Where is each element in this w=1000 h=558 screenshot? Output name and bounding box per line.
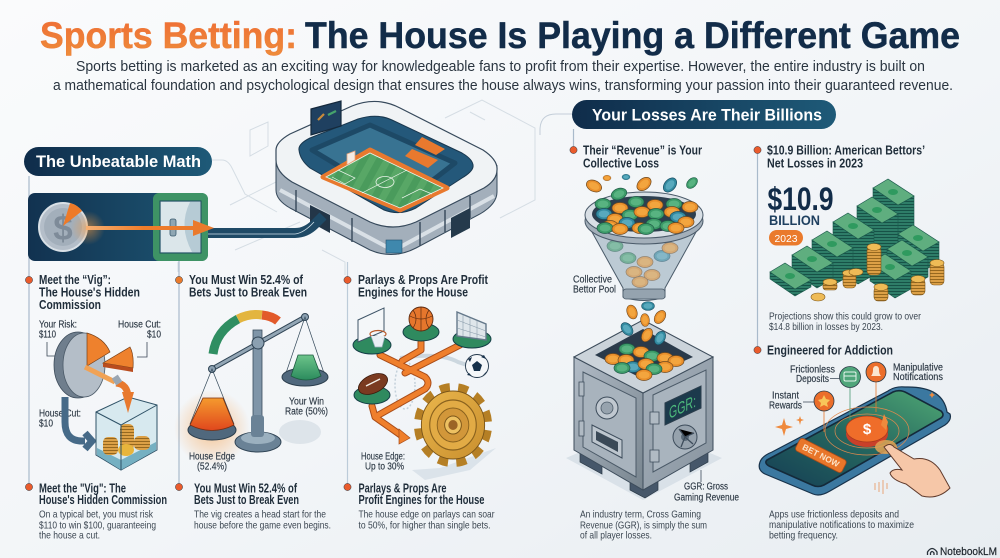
soccer ball: [466, 354, 488, 378]
stacks of cash and coins: [770, 179, 944, 301]
projection text: $14.8 billion in losses by 2023.: [769, 321, 883, 333]
bottom caption: vig: the house a cut.: [39, 530, 100, 542]
column: vig heading: [25, 273, 140, 312]
bet now button: BET NOW: [801, 442, 842, 469]
orange beam arrow: [86, 220, 214, 236]
green platforms: [353, 323, 491, 404]
pitch: [323, 150, 447, 210]
bet now button: [795, 437, 847, 473]
column: net losses heading: [754, 144, 925, 170]
coin stacks: [811, 244, 944, 301]
subtitle: Sports betting is marketed as an exciting way for knowledgeable fans to profit from their expertise. However, the entire industry is built on: [76, 59, 925, 75]
house edge label: House Edge:: [361, 452, 405, 462]
falling coins: [619, 302, 668, 347]
big number callout: BILLION: [769, 212, 820, 228]
dollar button: $: [863, 421, 872, 438]
stadium roof ring: [276, 101, 497, 227]
big number callout: 2023: [774, 233, 798, 245]
scale stand: [235, 330, 281, 452]
funnel rim: [585, 198, 703, 244]
gauge arc: [213, 314, 278, 354]
bottom caption: vig: $110 to win $100, guaranteeing: [39, 520, 156, 532]
GGR screen: [665, 386, 701, 425]
addiction body text: betting frequency.: [769, 530, 838, 542]
column: vig heading: Meet the “Vig”:: [39, 273, 111, 287]
blue curved arrow: [65, 397, 92, 449]
safe with GGR display: [566, 302, 722, 500]
bottom caption: break even: The vig creates a head start for the: [194, 508, 326, 520]
funnel cone: [592, 232, 696, 300]
panel: coin to vault diagram: [28, 193, 214, 261]
subtitle: [53, 59, 953, 94]
title: [40, 15, 960, 56]
bottom caption: vig: House's Hidden Commission: [39, 493, 167, 507]
section pill: The Unbeatable Math: [24, 147, 212, 176]
phone body: [759, 387, 950, 495]
column: parlays heading: Engines for the House: [358, 286, 468, 300]
collective bettor pool label: Bettor Pool: [573, 284, 616, 296]
football: [355, 369, 391, 399]
bottom caption: vig: Meet the "Vig": The: [39, 482, 126, 496]
balance scale diagram: [174, 314, 328, 472]
safe feet: [580, 450, 708, 498]
pipe and arrow: [116, 383, 128, 398]
house edge label: Up to 30%: [365, 462, 404, 472]
coins in safe: [605, 344, 684, 380]
safe right face: [643, 357, 713, 490]
addiction body text: [769, 508, 914, 542]
basketball: [409, 307, 433, 331]
phone illustration: [759, 362, 950, 497]
collective bettor pool label: [573, 274, 616, 296]
column: revenue heading: Collective Loss: [583, 156, 659, 170]
phone feature labels: Manipulative: [893, 362, 943, 374]
house edge label: [361, 452, 405, 472]
labels: $110: [39, 330, 56, 340]
safe top: [574, 320, 713, 393]
soccer goal: [457, 312, 486, 340]
stadium walls: [276, 160, 497, 255]
column: break even heading: Bets Just to Break Even: [189, 286, 307, 300]
GGR definition label: [674, 482, 739, 504]
big number callout: [768, 181, 834, 246]
labels: Your Risk:: [39, 320, 77, 330]
GGR body text: of all player losses.: [580, 530, 652, 542]
frictionless deposits icon: [840, 366, 860, 420]
orange weight: [188, 398, 236, 440]
section pill: The Unbeatable Math: The Unbeatable Math: [36, 152, 201, 171]
coin pile: [595, 196, 698, 234]
safe left face: [574, 357, 643, 490]
section pill: Your Losses Are Their Billions: Your Losses Are Their Billions: [592, 106, 822, 124]
collective bettor pool label: Collective: [573, 274, 612, 286]
orange routes: [372, 342, 460, 436]
safe slot: [592, 425, 622, 458]
bottom caption: vig: On a typical bet, you must risk: [39, 508, 154, 520]
column: vig heading: The House's Hidden: [39, 286, 140, 300]
labels: (52.4%): [197, 462, 227, 472]
labels: $10: [147, 330, 161, 340]
bottom caption: parlays: Parlays & Props Are: [358, 482, 447, 496]
labels: [39, 320, 161, 430]
basketball hoop: [358, 308, 386, 347]
column: net losses heading: Net Losses in 2023: [767, 156, 863, 170]
green weight: [282, 355, 328, 386]
column: revenue heading: [570, 144, 702, 170]
safe dial: [596, 397, 618, 419]
funnel of coins and chips: [584, 174, 703, 300]
bottom caption: parlays: [344, 482, 495, 532]
column: parlays heading: Parlays & Props Are Profit: [358, 273, 489, 287]
bottom caption: break even: Bets Just to Break Even: [194, 493, 299, 507]
labels: [189, 396, 328, 472]
notifications icon: [866, 362, 886, 412]
tube from vault to stadium: [205, 216, 323, 234]
bottom caption: break even: You Must Win 52.4% of: [194, 482, 298, 496]
labels: Your Win: [289, 396, 324, 408]
GGR definition label: GGR: Gross: [684, 482, 728, 492]
phone feature labels: Frictionless: [790, 364, 835, 376]
dollar button: [846, 416, 888, 447]
projection text: Projections show this could grow to over: [769, 310, 921, 322]
GGR screen: GGR:: [669, 391, 696, 423]
column: net losses heading: $10.9 Billion: American Bettors’: [767, 144, 925, 158]
glass box of coins: [96, 397, 157, 470]
coin with wedge: [54, 332, 133, 398]
subtitle: a mathematical foundation and psychological design that ensures the house always wins, transforming your passion into their guaranteed revenue.: [53, 78, 953, 94]
phone feature labels: Rewards: [769, 400, 802, 412]
dollar coin: [39, 203, 87, 251]
parlay network diagram: [353, 307, 496, 480]
bottom caption: parlays: to 50%, for higher than single bets.: [358, 520, 490, 532]
bottom caption: parlays: Profit Engines for the House: [358, 493, 485, 507]
labels: $10: [39, 418, 53, 430]
section pill: Your Losses Are Their Billions: [572, 100, 836, 129]
stadium seating bowl: [299, 116, 473, 213]
title: Sports Betting:: [40, 15, 297, 56]
phone feature labels: Deposits: [796, 374, 829, 385]
ripple rings: [825, 407, 909, 455]
labels: House Edge: [189, 452, 235, 462]
GGR body text: An industry term, Cross Gaming: [580, 508, 701, 520]
bottom caption: break even: house before the game even begins.: [194, 520, 331, 532]
stadium illustration: [276, 101, 497, 255]
title: The House Is Playing a Different Game: [305, 15, 960, 56]
column: revenue heading: Their “Revenue” is Your: [583, 144, 702, 158]
column: parlays heading: [344, 273, 489, 300]
labels: House Cut:: [118, 320, 161, 330]
projection text: [769, 310, 921, 333]
safe wheel: [673, 425, 697, 449]
sparkles: [775, 392, 935, 436]
cash stacks: [770, 179, 939, 298]
phone feature labels: Instant: [772, 390, 799, 402]
flying coins above funnel: [584, 174, 700, 202]
big number callout: $10.9: [768, 181, 834, 217]
column: break even heading: [175, 273, 307, 300]
instant rewards icon: [814, 391, 834, 432]
bottom caption: vig: [25, 482, 167, 542]
vault box: [153, 193, 208, 261]
bottom caption: parlays: The house edge on parlays can soar: [358, 508, 495, 520]
phone screen: [766, 391, 943, 486]
addiction body text: Apps use frictionless deposits and: [769, 508, 899, 520]
labels: House Cut:: [39, 408, 81, 420]
hand tapping: [875, 440, 950, 497]
scoreboard: [311, 101, 341, 135]
GGR body text: [580, 508, 707, 542]
addiction body text: manipulative notifications to maximize: [769, 519, 914, 531]
phone feature labels: Notifications: [893, 372, 943, 383]
column: addiction heading: Engineered for Addiction: [767, 344, 893, 358]
GGR body text: Revenue (GGR), is simply the sum: [580, 520, 707, 532]
dollar coin: $: [53, 209, 73, 248]
gold gear: [412, 384, 496, 480]
hinges: [579, 382, 659, 462]
vig diagram: [39, 320, 161, 470]
GGR definition label: Gaming Revenue: [674, 492, 739, 504]
phone feature labels: [769, 362, 943, 412]
column: vig heading: Commission: [39, 298, 101, 312]
labels: Rate (50%): [285, 406, 328, 418]
column: break even heading: You Must Win 52.4% of: [189, 273, 304, 287]
bottom caption: break even: [175, 482, 331, 532]
